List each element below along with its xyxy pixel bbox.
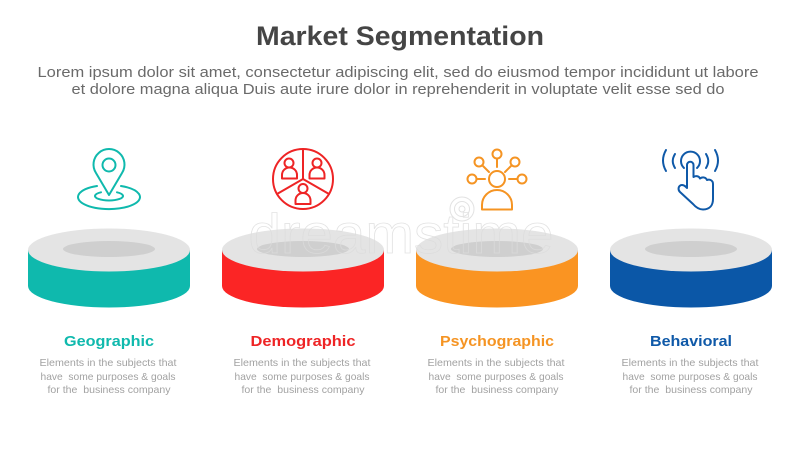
description: behavioral: Elements in the subjects that	[622, 357, 759, 369]
description: demographic: Elements in the subjects that	[234, 357, 371, 369]
description: demographic	[234, 357, 371, 396]
icon: people circle	[273, 149, 333, 209]
subtitle	[38, 64, 758, 98]
heading: geographic: Geographic	[64, 334, 154, 350]
panel: demographic	[222, 149, 384, 396]
subtitle: Lorem ipsum dolor sit amet, consectetur adipiscing elit, sed do eiusmod tempor incididunt ut labore	[38, 64, 758, 81]
icon: map pin	[78, 149, 140, 209]
description: behavioral: have some purposes & goals	[622, 371, 758, 383]
description: geographic	[40, 357, 177, 396]
panel: psychographic	[416, 150, 578, 396]
description: geographic: for the business company	[48, 384, 171, 396]
description: psychographic: Elements in the subjects that	[428, 357, 565, 369]
description: psychographic: for the business company	[436, 384, 559, 396]
description: geographic: have some purposes & goals	[40, 371, 176, 383]
heading: demographic: Demographic	[250, 334, 356, 350]
title: Market Segmentation	[256, 21, 544, 51]
description: behavioral: for the business company	[630, 384, 753, 396]
panel: behavioral	[610, 150, 772, 396]
cylinder: orange	[416, 228, 578, 308]
description: psychographic: have some purposes & goals	[428, 371, 564, 383]
cylinder: blue	[610, 228, 772, 308]
description: demographic: for the business company	[242, 384, 365, 396]
panel: geographic	[28, 149, 190, 396]
description: geographic: Elements in the subjects that	[40, 357, 177, 369]
description: demographic: have some purposes & goals	[234, 371, 370, 383]
subtitle: et dolore magna aliqua Duis aute irure dolor in reprehenderit in voluptate velit esse sed do	[72, 81, 724, 98]
icon: touch hand	[663, 150, 718, 210]
description: psychographic	[428, 357, 565, 396]
watermark: dreamstime	[248, 202, 554, 265]
cylinder: red	[222, 228, 384, 308]
heading: behavioral: Behavioral	[650, 334, 732, 350]
icon: person network	[468, 150, 526, 210]
heading: psychographic: Psychographic	[440, 334, 554, 350]
description: behavioral	[622, 357, 759, 396]
cylinder: teal	[28, 228, 190, 308]
